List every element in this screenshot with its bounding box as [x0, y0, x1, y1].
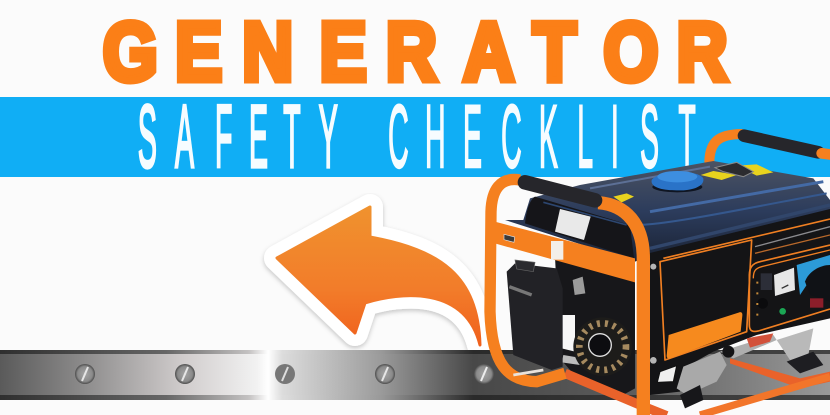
- recoil starter: [573, 317, 632, 376]
- metal strip with screws: [0, 350, 830, 400]
- screw 5: [474, 364, 494, 384]
- arrow pointing left: [277, 207, 480, 345]
- fuel cap: [652, 171, 703, 192]
- screw 2: [175, 364, 195, 384]
- screw 4: [375, 364, 395, 384]
- lower engine parts: [657, 333, 777, 408]
- white label on tank: [555, 209, 591, 240]
- engine block: [555, 257, 635, 397]
- latch: [715, 162, 753, 177]
- fuel tank: [505, 161, 830, 262]
- control panel body: [648, 209, 830, 395]
- title: GENERATOR: GENERATOR: [103, 6, 728, 98]
- orange panel plate: [667, 312, 742, 359]
- generator photo illustration: [489, 134, 830, 415]
- air filter: [507, 260, 563, 370]
- blue banner: [0, 97, 830, 177]
- screw 1: [75, 364, 95, 384]
- subtitle: SAFETY CHECKLIST: SAFETY: [138, 88, 338, 187]
- panel controls: [757, 255, 830, 318]
- rear feet and base rail: [730, 328, 830, 388]
- yellow stickers: [613, 164, 773, 202]
- main frame: [489, 179, 830, 415]
- rear handle: [709, 134, 830, 162]
- screw 3: [275, 364, 295, 384]
- subtitle: SAFETY CHECKLIST: CHECKLIST: [388, 88, 696, 187]
